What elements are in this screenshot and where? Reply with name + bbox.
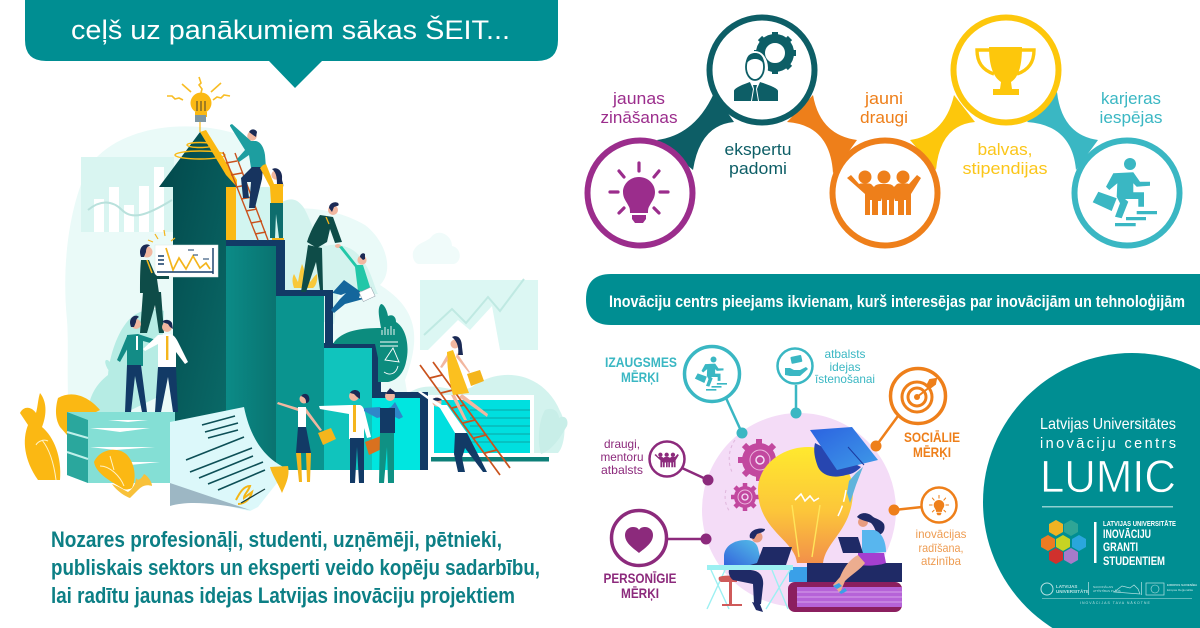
goal: growth: [605, 346, 748, 438]
partner logos: LATVIJAS: [1056, 584, 1077, 589]
panel: left illustration: [20, 77, 568, 511]
panel: LUMIC badge: INOVĀCIJU: [1103, 527, 1151, 541]
panel: LUMIC badge: GRANTI: [1103, 540, 1138, 554]
benefit: new knowledge: zināšanas: [600, 108, 678, 127]
partner logos: ATTĪSTĪBAS PLĀNS: [1093, 589, 1121, 593]
panel: LUMIC badge: Latvijas Universitātes: [1040, 416, 1176, 433]
light bulb on top of the arrow: [167, 77, 230, 132]
man reaching from step: [301, 202, 342, 292]
goal: social: MĒRĶI: [913, 444, 951, 460]
panel: LUMIC badge: inovāciju centrs: [1040, 436, 1176, 452]
panel: LUMIC badge: LUMIC: [1040, 451, 1176, 502]
small yellow plant in front: [94, 264, 317, 498]
goal: growth: IZAUGSMES: [605, 354, 677, 370]
panel: goals diagram: [600, 346, 966, 612]
benefit: new friends: [832, 89, 938, 246]
benefit: prizes: [954, 18, 1058, 178]
partner logos: INOVĀCIJAS TAVA NĀKOTNE: [1080, 601, 1151, 605]
goal: personal: [604, 510, 712, 601]
goal: innovation: inovācijas: [916, 527, 966, 541]
student man: [724, 529, 792, 612]
goal: growth: MĒRĶI: [621, 369, 659, 385]
man holding the ladder: [418, 391, 487, 472]
two supporting men: [117, 316, 188, 412]
man on the phone: [364, 388, 403, 483]
desk: [707, 565, 793, 609]
goal: social: [870, 368, 960, 460]
benefit: expert advice: [710, 18, 814, 178]
goal: personal: MĒRĶI: [621, 585, 659, 601]
hexagon logo: [1041, 520, 1086, 564]
goal: social: SOCIĀLIE: [904, 429, 960, 445]
chart held by a man: [148, 230, 218, 277]
teal plant with chart: [333, 304, 408, 382]
background mint blobs: [65, 126, 568, 470]
goal: friends and mentors: mentoru: [600, 450, 644, 464]
panel: LUMIC badge: [983, 353, 1200, 628]
access banner: [586, 274, 1200, 325]
partner logos: Eiropas Reģionālās: [1167, 587, 1194, 592]
lower ladder: [420, 362, 510, 475]
woman with bag: [277, 394, 336, 482]
partner logos: UNIVERSITĀTE: [1056, 588, 1089, 594]
upward arrow and stairs: [159, 130, 428, 470]
yellow plants behind stack: [20, 393, 100, 480]
benefit: career: [1074, 89, 1180, 246]
woman on the ladder: [260, 164, 284, 240]
goal: friends and mentors: atbalsts: [601, 463, 643, 477]
benefit: expert advice: padomi: [729, 159, 787, 178]
climber pulled up: [331, 246, 375, 313]
student woman: [833, 513, 886, 594]
benefit: expert advice: ekspertu: [724, 140, 792, 159]
goal: idea funding: atbalsts: [824, 347, 866, 361]
description text: [51, 527, 540, 608]
benefit: prizes: stipendijas: [962, 159, 1048, 178]
goal: friends and mentors: [600, 437, 714, 486]
contract document: [170, 407, 289, 511]
paper stack: [67, 412, 175, 483]
goal: idea funding: idejas: [830, 360, 860, 374]
pink backdrop: [702, 413, 896, 607]
man pointing with briefcase: [319, 390, 384, 483]
panel: LUMIC badge: STUDENTIEM: [1103, 554, 1165, 568]
partner logos: [1041, 582, 1198, 605]
benefit: career: karjeras: [1101, 89, 1161, 108]
description text: lai radītu jaunas idejas Latvijas inovāciju projektiem: [51, 583, 515, 608]
goal: innovation: radīšana,: [918, 541, 964, 555]
goal: idea funding: īstenošanai: [815, 372, 875, 386]
benefit: new friends: draugi: [860, 108, 908, 127]
gears: [725, 439, 780, 512]
books: [788, 563, 902, 612]
panel: LUMIC badge: LATVIJAS UNIVERSITĀTE: [1103, 520, 1176, 528]
graduation cap: [810, 427, 878, 503]
title banner: ceļš uz panākumiem sākas ŠEIT...: [71, 14, 510, 45]
goal: innovation: atzinība: [921, 554, 961, 568]
goal: personal: PERSONĪGIE: [604, 570, 676, 586]
benefit: new friends: jauni: [864, 89, 903, 108]
monitor behind the stairs: [428, 395, 549, 462]
title banner: [25, 0, 558, 88]
goal: idea funding: [778, 347, 875, 418]
benefit: career: iespējas: [1100, 108, 1162, 127]
benefit: prizes: balvas,: [978, 140, 1032, 159]
man climbing arrow: [230, 124, 266, 208]
benefit: new knowledge: jaunas: [612, 89, 665, 108]
goal: innovation: [888, 488, 966, 568]
woman climbing ladder: [440, 336, 488, 420]
big bulb: [758, 447, 853, 563]
description text: publiskais sektors un eksperti veido kopēju sadarbību,: [51, 555, 540, 580]
panel: benefits chain: [588, 18, 1180, 246]
upper ladder: [223, 152, 268, 240]
description text: Nozares profesionāļi, studenti, uzņēmēji, pētnieki,: [51, 527, 502, 552]
partner logos: NACIONĀLAIS: [1093, 585, 1113, 589]
goal: friends and mentors: draugi,: [604, 437, 640, 451]
partner logos: EIROPAS SAVIENĪBA: [1167, 583, 1198, 587]
man holding chart: [140, 244, 169, 333]
benefit: new knowledge: [588, 89, 692, 246]
